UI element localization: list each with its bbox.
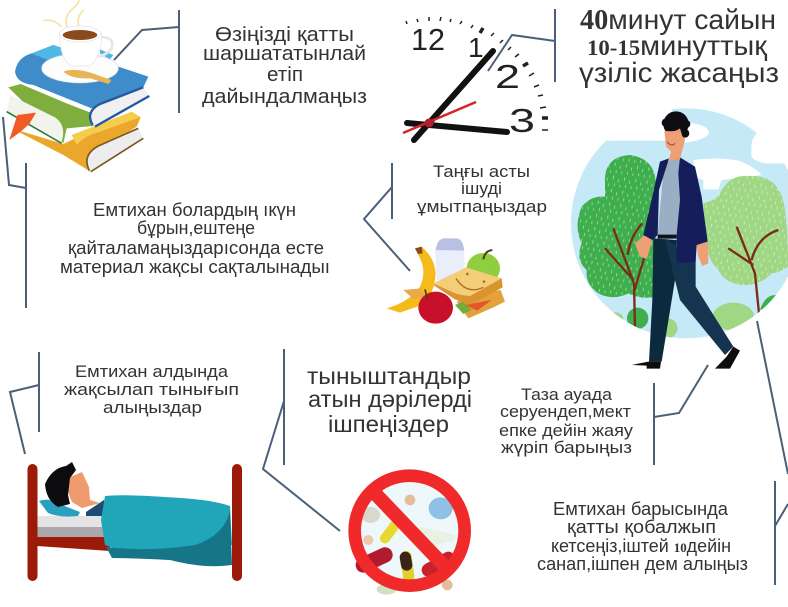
text: day before exam: бұрын,ештеңе [137, 218, 255, 238]
illustration: man walking in park [565, 100, 788, 369]
icon: breakfast food [387, 238, 505, 324]
text: do not take sedatives: атын дәрілерді [308, 386, 472, 412]
text: during the exam: Емтихан барысында [553, 499, 729, 519]
title: take a break every 40 minutes: үзіліс жасаңыз [579, 57, 779, 88]
title: take a break every 40 minutes [579, 4, 779, 88]
connector: walking tip to man [654, 365, 708, 465]
connector: man to exam-time tip [757, 321, 788, 585]
text: rest well before the exam: Емтихан алдында [75, 362, 229, 381]
text: during the exam [537, 499, 748, 574]
text: walk in fresh air: епке дейін жаяу [499, 421, 634, 440]
text: walk in fresh air [499, 385, 634, 457]
text: do not forget breakfast: Таңғы асты [433, 162, 530, 181]
icon: wall clock: 1 [468, 32, 484, 63]
text: do not overtire yourself: дайындалмаңыз [202, 86, 367, 108]
connector: rest tip to bed [10, 352, 39, 454]
tree: light green right [703, 176, 788, 285]
text: walk in fresh air: серуендеп,мект [500, 402, 631, 421]
text: during the exam: кетсеңіз,іштей 10дейін [551, 536, 731, 556]
text: do not take sedatives [307, 363, 472, 437]
title: take a break every 40 minutes: 40минут сайын [580, 4, 776, 36]
text: during the exam: қатты қобалжып [567, 517, 716, 537]
icon: wall clock: 3 [509, 102, 535, 139]
text: do not forget breakfast: ішуді [461, 179, 502, 198]
text: day before exam: қайталамаңыздарıсонда есте [68, 238, 324, 258]
text: day before exam [60, 200, 330, 277]
text: day before exam: материал жақсы сақталынадыı [60, 257, 330, 277]
connector: sedatives tip to pills [263, 349, 340, 531]
connector: books to tip [114, 10, 179, 113]
icon: wall clock: 2 [495, 58, 520, 95]
icon: man sleeping in bed [28, 462, 242, 581]
text: do not forget breakfast [417, 162, 547, 216]
text: do not take sedatives: тыныштандыр [307, 363, 471, 389]
text: day before exam: Емтихан болардың ıкүн [93, 200, 296, 220]
text: rest well before the exam [64, 362, 239, 417]
icon: wall clock: 12 [411, 22, 445, 57]
icon: books with coffee cup [7, 0, 149, 172]
connector: breakfast tip to food [364, 163, 410, 271]
icon: no pills sign [355, 476, 465, 595]
title: take a break every 40 minutes: 10-15минуттық [587, 30, 768, 61]
text: walk in fresh air: жүріп барыңыз [501, 438, 632, 457]
text: during the exam: санап,ішпен дем алыңыз [537, 554, 748, 574]
text: do not overtire yourself: Өзіңізді қатты [215, 24, 354, 46]
text: rest well before the exam: жақсылап тынығып [64, 380, 239, 399]
text: do not overtire yourself: етіп [267, 64, 303, 86]
text: do not forget breakfast: ұмытпаңыздар [417, 197, 547, 216]
text: do not overtire yourself: шаршататынлай [203, 43, 366, 65]
text: rest well before the exam: алыңыздар [103, 398, 202, 417]
text: do not take sedatives: ішпеңіздер [328, 411, 449, 437]
text: walk in fresh air: Таза ауада [521, 385, 613, 404]
connector: books to exam-eve tip [3, 117, 26, 308]
connector: clock to tip [488, 9, 555, 82]
tree: dark green left [577, 155, 656, 298]
text: do not overtire yourself [202, 24, 367, 108]
man: walking figure [632, 111, 740, 369]
icon: wall clock [403, 17, 548, 140]
